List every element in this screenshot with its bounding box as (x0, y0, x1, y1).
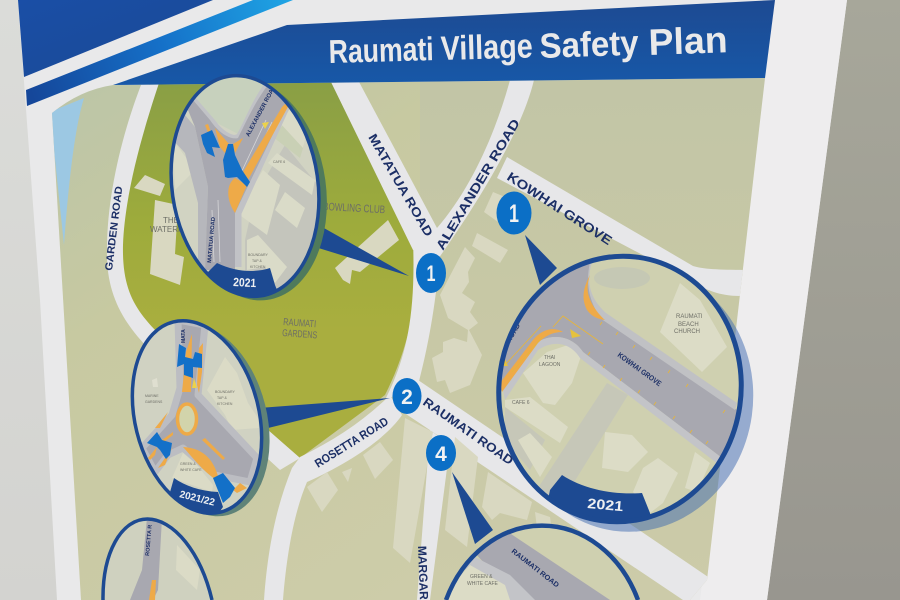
marker 2 (392, 378, 422, 414)
buildings: east of Margaret (445, 437, 478, 547)
label: Raumati Gardens: RAUMATI (283, 317, 316, 330)
title banner (113, 0, 775, 85)
marker 1: junction: 1 (426, 261, 436, 286)
lens: Kowhai Grove: CHURCH (674, 329, 700, 335)
lens shadow (119, 310, 289, 530)
title: Safety (539, 24, 640, 66)
lens road label: road stub: ROAD (506, 323, 522, 344)
blue crossings (201, 130, 250, 187)
road label: Matatua Road: MATATUA ROAD (365, 132, 436, 239)
marker 1: Kowhai Grove: 1 (509, 200, 519, 228)
road label: Raumati Road: RAUMATI ROAD (420, 395, 516, 468)
year band (208, 263, 276, 295)
lens: Kowhai Grove (480, 240, 770, 548)
orange treatments (148, 334, 247, 493)
lens base (446, 526, 638, 600)
lens shadow (494, 250, 770, 548)
map labels: WATERFRONT (150, 225, 206, 234)
pointer: lens 3 (Kowhai) (525, 235, 557, 285)
upper green area (196, 78, 263, 134)
lens: roundabout: WHITE CAFE (180, 468, 202, 472)
lens: roundabout: TAP & (217, 396, 227, 400)
header swooshes (18, 0, 293, 106)
road label: Margaret Road: MARGAR (415, 546, 431, 600)
paved area (245, 145, 322, 290)
label: The Waterfront: THE (163, 216, 179, 225)
lens label: Green & White Cafe: GREEN & (180, 462, 196, 466)
water (50, 98, 84, 245)
upper sidewalk (588, 262, 737, 410)
orange kerb: top (584, 275, 605, 320)
roads (107, 80, 770, 600)
lens label: Cafe 6: CAFE 6 (273, 160, 285, 164)
marker 4 (426, 435, 456, 471)
map panel (40, 70, 770, 600)
lens label: Thai Lagoon: THAI (544, 355, 555, 361)
lens base (103, 519, 212, 600)
road label: Alexander Road: ALEXANDER ROAD (433, 116, 523, 253)
road label: Garden Road: GARDEN ROAD (103, 185, 125, 271)
lens label: Marine Gardens: MARINE (145, 394, 159, 398)
swoosh: blue stripe (26, 0, 293, 106)
park: Raumati Gardens (120, 80, 418, 458)
building: long west of Margaret (393, 418, 433, 563)
lens road label: ROSETTA R (145, 525, 154, 556)
lens road label: Alexander Road: ALEXANDER ROAD (245, 84, 278, 138)
lower sidewalk (503, 337, 722, 464)
marker 1: junction (416, 253, 446, 293)
lens: roundabout: KITCHEN (217, 402, 233, 406)
lens base (113, 307, 281, 527)
yellow markings (505, 316, 725, 444)
year band (165, 478, 223, 525)
yellow triangle (262, 122, 269, 129)
number markers (392, 192, 532, 471)
wall: left (0, 0, 80, 600)
marker 2: 2 (401, 386, 413, 409)
lens label: Raumati Beach Church: RAUMATI (676, 314, 703, 320)
building: Green & White Cafe (172, 453, 213, 492)
building (176, 545, 200, 590)
lens: Kowhai Grove: LAGOON (539, 362, 561, 368)
left sidewalk (173, 115, 208, 270)
title: Village (440, 27, 533, 68)
buildings: Rosetta Road (363, 442, 393, 479)
lens base (157, 66, 333, 306)
lens year: 2021 (587, 495, 624, 514)
road label: Rosetta Road: ROSETTA ROAD (312, 414, 391, 471)
yellow triangle (192, 378, 197, 388)
road: Margaret Road (417, 430, 450, 600)
building: Green & White Cafe (448, 565, 510, 600)
sidewalk (455, 552, 535, 600)
lens road label: RAUMATI ROAD (510, 548, 560, 589)
wall: right (760, 0, 900, 600)
paved area (530, 383, 628, 505)
building: small (152, 378, 158, 387)
lens road label: Kowhai Grove: KOWHAI GROVE (616, 350, 663, 388)
lens: Kowhai Grove: BEACH (678, 322, 699, 328)
road markings (212, 120, 272, 262)
lens: Raumati Road (446, 526, 638, 600)
lens: roundabout (130, 319, 270, 516)
upper pale blob (594, 267, 650, 289)
road label: Kowhai Grove: KOWHAI GROVE (504, 169, 615, 248)
title (328, 19, 728, 70)
road: Raumati Road (400, 380, 720, 600)
building: The Waterfront (150, 200, 184, 285)
lens: roundabout: GARDENS (145, 400, 163, 404)
pointer: lens 4 (452, 472, 493, 544)
building: Boundary Tap & Kitchen (207, 357, 259, 430)
right border highlight (700, 0, 847, 600)
lens label: Green & White Cafe: GREEN & (470, 574, 493, 580)
map labels: GARDENS (282, 328, 318, 341)
building cluster: north east (432, 247, 482, 393)
land: left (40, 80, 420, 600)
lens base (482, 240, 758, 538)
road: Kowhai Grove (497, 157, 770, 296)
lens shadow (163, 70, 341, 310)
lens ring (482, 240, 758, 538)
lens label: Boundary Tap & Kitchen: BOUNDARY (248, 253, 268, 257)
lens year: 2021/22 (178, 489, 216, 509)
kerb and right sidewalk (193, 85, 288, 267)
pointer: lens 1 (312, 223, 409, 276)
map labels (150, 201, 385, 341)
lens: Alexander / Matatua junction: KITCHEN (250, 265, 266, 269)
lens: Alexander / Matatua junction (169, 74, 327, 300)
buildings (505, 283, 727, 513)
road: main stretch (385, 250, 436, 400)
callout pointers (259, 223, 557, 544)
road: Alexander Road (436, 80, 534, 262)
year band (540, 475, 655, 540)
roadway (130, 518, 162, 600)
blue crossings (147, 344, 235, 503)
lens: Raumati Road: WHITE CAFE (467, 581, 498, 587)
lens label: Boundary Tap & Kitchen: BOUNDARY (215, 390, 235, 394)
lens ring (103, 519, 212, 600)
label: Bowling Club: BOWLING CLUB (323, 201, 385, 216)
building: Bowling Club (335, 220, 399, 284)
building: The Waterfront annex (134, 175, 165, 196)
title: Raumati (328, 30, 434, 70)
swoosh: dark blue (18, 0, 213, 77)
lens: Alexander / Matatua junction: TAP & (252, 259, 262, 263)
road labels (103, 116, 615, 600)
roadway (188, 85, 288, 270)
lens ring (157, 66, 333, 306)
lens year: 2021 (233, 275, 257, 290)
road: Garden Road (107, 80, 300, 470)
road: Matatua Road (330, 80, 440, 255)
marker 4: 4 (435, 443, 447, 466)
roadway (480, 255, 740, 458)
lens road label: Matatua Road: MATATUA ROAD (207, 217, 217, 263)
lens ring (446, 526, 638, 600)
marker 1: Kowhai Grove (496, 192, 532, 234)
buildings (173, 105, 315, 283)
orange treatments (205, 102, 289, 213)
roadway (470, 530, 610, 600)
orange kerb: left (500, 329, 563, 392)
buildings (134, 175, 555, 563)
roundabout ring (178, 404, 196, 434)
road: Rosetta Road (264, 395, 402, 600)
yield triangles (570, 329, 581, 338)
roadway (142, 320, 257, 482)
lens label: Cafe 6: CAFE 6 (512, 400, 530, 406)
pointer: lens 2 (259, 398, 390, 430)
green patch (276, 126, 303, 158)
lens: Rosetta Road (103, 518, 212, 600)
land: right (420, 70, 770, 600)
orange treatment (149, 580, 156, 600)
lens road label: MATA (181, 329, 187, 343)
lens ring (113, 307, 281, 527)
title: Plan (648, 19, 728, 63)
